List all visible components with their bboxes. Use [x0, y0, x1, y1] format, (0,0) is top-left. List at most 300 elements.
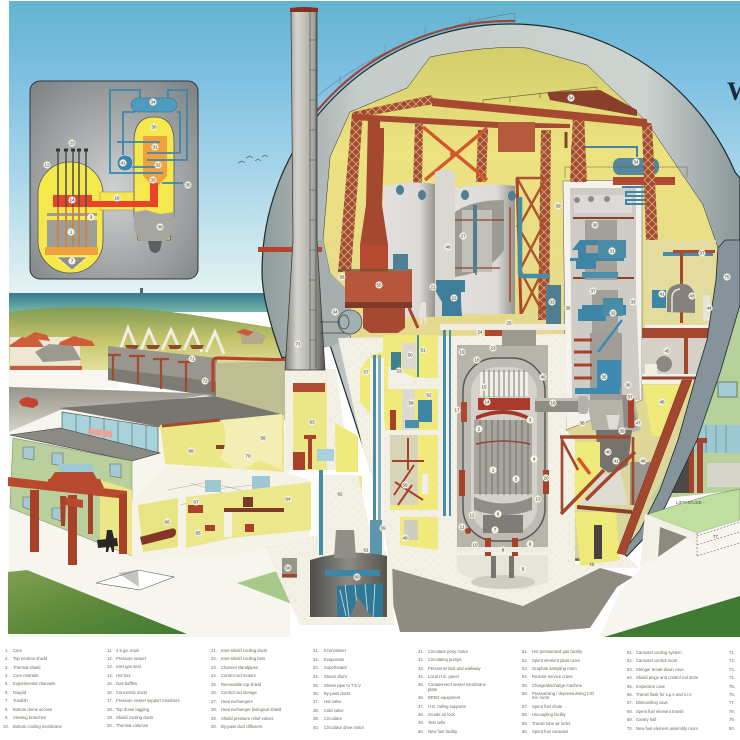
- diagram inset panel: [30, 81, 198, 279]
- number markers on cutaway: 46: [540, 375, 546, 380]
- right hand ground: [600, 514, 740, 637]
- inset number labels: 16: [114, 196, 120, 201]
- inset number labels: 30: [151, 125, 157, 130]
- inset connecting duct: [100, 192, 138, 210]
- inset number labels: 3: [90, 215, 93, 220]
- legend column 7: Shield plugs and control rod store: [636, 675, 699, 680]
- floor grid: [168, 482, 255, 505]
- legend column 3: 25.: [211, 682, 217, 687]
- legend column 3: 22.: [211, 656, 217, 661]
- small dimension labels: 76: [589, 562, 594, 567]
- legend column 5: 42.: [418, 657, 424, 662]
- outer red frame: [688, 438, 707, 493]
- legend column 4: Circulator drive motor: [324, 725, 365, 730]
- legend: [3, 648, 735, 734]
- legend column 2: 15.: [107, 681, 113, 686]
- legend column 7: Carousel cooling system: [636, 650, 682, 655]
- legend column 2: Top dome lagging: [116, 707, 150, 712]
- number markers on cutaway: 30: [592, 223, 598, 228]
- number markers on cutaway: [163, 94, 731, 581]
- number markers on cutaway: 35: [601, 375, 607, 380]
- legend column 5: Goods air lock: [428, 712, 456, 717]
- legend column 3: 29.: [211, 716, 217, 721]
- legend column 4: 33.: [313, 665, 319, 670]
- legend column 3: Heat exchanger biological shield: [221, 707, 282, 712]
- legend column 4: 37.: [313, 699, 319, 704]
- legend column 6: mic room: [532, 695, 550, 700]
- sky background: [9, 1, 740, 294]
- legend column 7: Spent fuel element transit: [636, 709, 684, 714]
- inset control rods: [56, 150, 88, 247]
- inset number labels: 35: [185, 183, 191, 188]
- legend column 5: Containment vessel membrane: [428, 682, 487, 687]
- legend column 1: Experimental channels: [13, 681, 55, 686]
- legend column 4: Evaporator: [324, 657, 345, 662]
- legend column 6: Spent fuel carousel: [532, 729, 568, 734]
- gantry hall room 69: [160, 414, 284, 472]
- legend column 1: 5.: [5, 681, 8, 686]
- number markers on cutaway: 58: [408, 401, 414, 406]
- legend column 3: 24.: [211, 673, 217, 678]
- steam drum and platform: [565, 147, 687, 245]
- room 62: [335, 476, 362, 508]
- legend column 2: Pressure vessel: [116, 656, 146, 661]
- legend column 2: Inlet gas seal: [116, 664, 141, 669]
- legend column 5: 49.: [418, 720, 424, 725]
- legend column 5: Personnel lock and walkway: [428, 666, 482, 671]
- number markers on cutaway: 47: [635, 421, 641, 426]
- legend column 3: Heat exchangers: [221, 699, 253, 704]
- legend column 1: 3.: [5, 665, 8, 670]
- number markers on cutaway: 33: [549, 300, 555, 305]
- crane columns and bracing: [338, 113, 661, 320]
- number markers on cutaway: 48: [445, 245, 451, 250]
- legend column 5: 44.: [418, 674, 424, 679]
- front lawn: [8, 570, 187, 634]
- legend column 8: 80.: [729, 726, 735, 731]
- legend column 4: 36.: [313, 691, 319, 696]
- legend column 7: 66.: [627, 692, 633, 697]
- inset core: [45, 213, 98, 270]
- office block green wall: [10, 438, 132, 556]
- containment sphere shell: [262, 24, 740, 560]
- legend column 6: 54.: [522, 674, 528, 679]
- legend column 5: 47.: [418, 704, 424, 709]
- number markers on cutaway: 34: [332, 310, 338, 315]
- legend column 6: 51.: [522, 649, 528, 654]
- inset number labels: 14: [69, 198, 75, 203]
- number markers on cutaway: 36: [625, 383, 631, 388]
- legend column 2: [107, 648, 180, 728]
- legend column 2: Shield cooling ducts: [116, 715, 153, 720]
- number markers on cutaway: 67: [193, 500, 199, 505]
- number markers on cutaway: 24: [477, 330, 483, 335]
- white inner wall of right room: [563, 180, 642, 430]
- legend column 2: 13.: [107, 664, 113, 669]
- number markers on cutaway: 32: [610, 311, 616, 316]
- legend column 2: 14.: [107, 673, 113, 678]
- legend column 7: 70.: [627, 726, 633, 731]
- legend column 1: Tundish: [13, 698, 28, 703]
- small dimension labels: [589, 534, 718, 567]
- legend column 1: 1.: [5, 648, 8, 653]
- legend column 4: 38.: [313, 708, 319, 713]
- legend column 5: 48.: [418, 712, 424, 717]
- legend column 7: 69.: [627, 717, 633, 722]
- legend column 3: 26.: [211, 690, 217, 695]
- spent fuel vault concrete: [265, 475, 394, 625]
- inset number labels: [43, 98, 192, 265]
- number markers on cutaway: 8: [502, 548, 505, 553]
- legend column 7: 64.: [627, 675, 633, 680]
- legend column 3: Shield pressure relief valves: [221, 716, 273, 721]
- legend column 8: 79.: [729, 717, 735, 722]
- legend column 2: 4.5 ga. main: [116, 648, 140, 653]
- number markers on cutaway: 10: [472, 543, 478, 548]
- ground: [9, 388, 290, 637]
- number markers on cutaway: 52: [426, 393, 432, 398]
- legend column 5: Test cells: [428, 720, 445, 725]
- legend column 1: 8.: [5, 707, 8, 712]
- blue duct on shield: [520, 197, 550, 276]
- legend column 1: 6.: [5, 690, 8, 695]
- inset number labels: 34: [150, 100, 156, 105]
- room 66: [138, 498, 178, 552]
- number markers on cutaway: 34: [633, 160, 639, 165]
- legend column 6: 60.: [522, 729, 528, 734]
- legend column 6: 55.: [522, 683, 528, 688]
- inset number labels: 12: [44, 163, 50, 168]
- legend column 6: Spent fuel chute: [532, 704, 563, 709]
- legend column 7: [627, 650, 699, 731]
- legend column 6: Hot pressurised gas facility: [532, 649, 583, 654]
- yellow room 46: [643, 385, 690, 436]
- red duct to chimney: [213, 358, 288, 392]
- number markers on cutaway: 75: [724, 275, 730, 280]
- dome interior: [323, 47, 718, 560]
- legend column 4: 34.: [313, 674, 319, 679]
- legend column 3: 27.: [211, 699, 217, 704]
- legend column 2: Gas baffles: [116, 681, 137, 686]
- reactor lower cavity: [457, 555, 548, 590]
- legend column 3: 30.: [211, 724, 217, 729]
- number markers on cutaway: 53: [396, 369, 402, 374]
- rooms 64 and 65: [186, 482, 311, 548]
- legend column 1: 7.: [5, 698, 8, 703]
- legend column 5: 46.: [418, 695, 424, 700]
- legend column 5: Local H.E. panel: [428, 674, 459, 679]
- number markers on cutaway: 64: [285, 497, 291, 502]
- number markers on cutaway: 21: [430, 285, 436, 290]
- right lawn: [648, 489, 740, 533]
- legend column 3: Inter-shield cooling ducts: [221, 648, 267, 653]
- legend column 3: Control rod storage: [221, 690, 258, 695]
- inset number labels: 33: [150, 178, 156, 183]
- main concrete structure: [338, 334, 640, 606]
- small flask cell 68: [282, 558, 297, 578]
- blue shaft pipe: [319, 470, 323, 555]
- number markers on cutaway: 33: [630, 300, 636, 305]
- legend column 5: 41.: [418, 649, 424, 654]
- number markers on cutaway: 50: [407, 353, 413, 358]
- number markers on cutaway: 44: [706, 306, 712, 311]
- legend column 3: Control rod motors: [221, 673, 256, 678]
- inset number labels: 41: [120, 161, 126, 166]
- upper roof: [59, 396, 284, 427]
- legend column 1: Bottom cooling membrane: [13, 724, 63, 729]
- number markers on cutaway: 71: [189, 357, 195, 362]
- number markers on cutaway: 61: [363, 548, 369, 553]
- legend column 7: Carousel control room: [636, 658, 678, 663]
- legend column 6: Reactor service crane: [532, 674, 573, 679]
- legend column 2: Concentric ducts: [116, 690, 147, 695]
- legend column 8: 73.: [729, 667, 735, 672]
- number markers on cutaway: 18: [474, 358, 480, 363]
- legend column 6: Uncoupling facility: [532, 712, 567, 717]
- inset number labels: 31: [152, 145, 158, 150]
- number markers on cutaway: 25: [506, 321, 512, 326]
- carousel tank: [310, 530, 387, 617]
- legend column 4: 39.: [313, 716, 319, 721]
- charge machine 55: [338, 118, 418, 333]
- green block right: [650, 300, 740, 500]
- figure at entrance: [97, 530, 118, 552]
- legend column 6: 59.: [522, 721, 528, 726]
- number markers on cutaway: 13: [535, 497, 541, 502]
- number markers on cutaway: 72: [202, 379, 208, 384]
- number markers on cutaway: 46: [659, 400, 665, 405]
- legend column 1: 10.: [3, 724, 9, 729]
- inset number labels: 1: [70, 230, 73, 235]
- legend column 6: 58.: [522, 712, 528, 717]
- number markers on cutaway: 48: [640, 459, 646, 464]
- legend column 2: 20.: [107, 723, 113, 728]
- legend column 7: Transit flask for s.p.s and s.r.s: [636, 692, 691, 697]
- legend column 2: 16.: [107, 690, 113, 695]
- legend column 4: Economiser: [324, 648, 347, 653]
- number markers on cutaway: 70: [245, 454, 251, 459]
- inset steam circuit: [110, 90, 187, 183]
- small lawn: [237, 570, 300, 607]
- legend column 4: 32.: [313, 657, 319, 662]
- number markers on cutaway: 39: [619, 429, 625, 434]
- legend column 6: 56.: [522, 691, 528, 696]
- legend column 4: 40.: [313, 725, 319, 730]
- rear wall block: [216, 361, 286, 420]
- legend column 3: 28.: [211, 707, 217, 712]
- inset steam drum: [131, 98, 177, 112]
- legend column 4: 35.: [313, 683, 319, 688]
- legend column 5: 50.: [418, 729, 424, 734]
- legend column 5: 45.: [418, 682, 424, 687]
- shield cylinder right: [455, 184, 515, 314]
- circulator 39 and drive 40: [587, 395, 640, 475]
- inset circulator: [117, 155, 133, 171]
- number markers on cutaway: 22: [451, 296, 457, 301]
- red duct platform behind stack: [258, 247, 322, 252]
- inset hot gas path: [53, 183, 158, 207]
- opening showing heat exchanger 27: [455, 200, 504, 277]
- strut of heat exchanger support: [617, 380, 692, 555]
- shield round hatches: [396, 185, 516, 201]
- number markers on cutaway: 20: [543, 476, 549, 481]
- number markers on cutaway: 31: [609, 249, 615, 254]
- legend column 2: Thermal columns: [116, 723, 148, 728]
- number markers on cutaway: 11: [460, 525, 465, 530]
- upper glazed storey: [62, 412, 158, 453]
- legend column 2: Hot box: [116, 673, 131, 678]
- number markers on cutaway: 2: [478, 427, 481, 432]
- inset number labels: 7: [71, 259, 74, 264]
- lower hall concrete: [132, 465, 310, 560]
- inset number labels: 32: [155, 163, 161, 168]
- number markers on cutaway: 5: [522, 567, 525, 572]
- legend column 4: Cold valve: [324, 708, 344, 713]
- number markers on cutaway: 54: [568, 96, 574, 101]
- legend column 7: Gantry hall: [636, 717, 656, 722]
- legend column 6: 52.: [522, 658, 528, 663]
- legend column 7: New fuel element assembly room: [636, 726, 698, 731]
- legend column 6: Transit tube air locks: [532, 721, 570, 726]
- number markers on cutaway: 66: [164, 520, 170, 525]
- legend column 7: Inspection cave: [636, 684, 666, 689]
- chimney base tower: [285, 369, 358, 472]
- number markers on cutaway: 12: [469, 513, 475, 518]
- legend column 8: 74.: [729, 675, 735, 680]
- number markers on cutaway: 5: [515, 477, 518, 482]
- number markers on cutaway: 68: [285, 566, 291, 571]
- car: [19, 397, 38, 408]
- legend column 1: Thermal shield: [13, 665, 41, 670]
- air lock sphere 34: [320, 310, 362, 334]
- number markers on cutaway: 73: [295, 342, 301, 347]
- stack support gray wedge: [292, 240, 350, 347]
- circulators on shield base: [436, 280, 465, 316]
- number markers on cutaway: 7: [494, 528, 497, 533]
- number markers on cutaway: 17: [454, 408, 460, 413]
- number markers on cutaway: 56: [339, 275, 345, 280]
- sphere outer rail: [317, 13, 515, 111]
- number markers on cutaway: 55: [376, 283, 382, 288]
- legend column 6: [522, 649, 594, 734]
- right dark lawn: [604, 596, 740, 637]
- blue caves: [205, 476, 270, 492]
- legend column 3: Channel standpipes: [221, 665, 258, 670]
- number markers on cutaway: 41: [659, 292, 665, 297]
- legend column 5: Circulating pumps: [428, 657, 462, 662]
- number markers on cutaway: 16: [550, 401, 556, 406]
- legend column 1: Bottom dome access: [13, 707, 52, 712]
- legend column 7: 61.: [627, 650, 633, 655]
- white road: [9, 370, 119, 388]
- inset number labels: 23: [69, 141, 75, 146]
- legend column 3: By-pass duct diffusers: [221, 724, 262, 729]
- inset number labels: 39: [157, 225, 163, 230]
- number markers on cutaway: 43: [689, 294, 695, 299]
- legend column 1: Viewing branches: [13, 715, 46, 720]
- legend column 7: Stringer break-down cave: [636, 667, 684, 672]
- blue shaft beside reactor: [443, 328, 451, 516]
- legend column 2: 12.: [107, 656, 113, 661]
- number markers on cutaway: 1: [492, 468, 495, 473]
- legend column 4: Steam pipe to T.S.V.: [324, 683, 362, 688]
- car park: [9, 387, 215, 432]
- legend column 4: By-pass ducts: [324, 691, 350, 696]
- number markers on cutaway: 40: [605, 450, 611, 455]
- reactor bay: [457, 345, 548, 547]
- lifthouse label: LIFTHOUSE -: [676, 500, 705, 505]
- number markers on cutaway: 59: [380, 526, 386, 531]
- legend column 3: 21.: [211, 648, 217, 653]
- legend column 7: 67.: [627, 700, 633, 705]
- number markers on cutaway: 6: [497, 512, 500, 517]
- legend column 6: 53.: [522, 666, 528, 671]
- legend column 8: 77.: [729, 700, 735, 705]
- legend column 4: Circulator: [324, 716, 343, 721]
- legend column 5: Circulator pony motor: [428, 649, 469, 654]
- room 45: [642, 338, 708, 384]
- room 57 arch: [360, 352, 388, 560]
- legend column 8: 75.: [729, 684, 735, 689]
- legend column 4: 31.: [313, 648, 319, 653]
- village houses: [10, 329, 266, 370]
- reactor pressure vessel: [457, 358, 549, 578]
- legend column 8: [729, 650, 735, 731]
- ground hatch: [96, 570, 174, 590]
- number markers on cutaway: 45: [664, 349, 670, 354]
- legend column 5: BPED equipment: [428, 695, 461, 700]
- legend column 8: 78.: [729, 709, 735, 714]
- legend column 1: 4.: [5, 673, 8, 678]
- legend column 3: Removable top shield: [221, 682, 262, 687]
- number markers on cutaway: 57: [363, 370, 369, 375]
- red rod on shield: [509, 207, 511, 302]
- legend column 8: 71.: [729, 650, 735, 655]
- concentric duct 16: [535, 396, 588, 414]
- number markers on cutaway: 39: [555, 204, 561, 209]
- legend column 1: Top neutron shield: [13, 656, 48, 661]
- legend column 1: 2.: [5, 656, 8, 661]
- legend column 6: 57.: [522, 704, 528, 709]
- legend column 7: 68.: [627, 709, 633, 714]
- legend column 4: Hot valve: [324, 699, 342, 704]
- legend column 1: Core: [13, 648, 23, 653]
- legend column 8: 76.: [729, 692, 735, 697]
- small dimension labels: 77: [713, 534, 718, 539]
- number markers on cutaway: 37: [590, 289, 596, 294]
- number markers on cutaway: 69: [188, 449, 194, 454]
- number markers on cutaway: 37: [627, 395, 633, 400]
- number markers on cutaway: 9: [529, 542, 532, 547]
- personnel figure: [419, 302, 427, 324]
- legend column 2: Pressure vessel support members: [116, 698, 180, 703]
- number markers on cutaway: 4: [533, 457, 536, 462]
- legend column 8: 72.: [729, 658, 735, 663]
- legend column 2: 19.: [107, 715, 113, 720]
- chimney stack: [285, 7, 325, 370]
- number markers on cutaway: 27: [460, 234, 466, 239]
- rooms column left of reactor: [383, 335, 438, 550]
- ground rock: [390, 568, 633, 632]
- evaporator blue: [570, 240, 626, 269]
- central column 48: [435, 170, 455, 316]
- number markers on cutaway: 14: [484, 400, 490, 405]
- legend column 6: Charge/discharge machine: [532, 683, 583, 688]
- legend column 1: Diagrid: [13, 690, 27, 695]
- number markers on cutaway: 59: [402, 483, 408, 488]
- legend column 7: 65.: [627, 684, 633, 689]
- legend column 7: 62.: [627, 658, 633, 663]
